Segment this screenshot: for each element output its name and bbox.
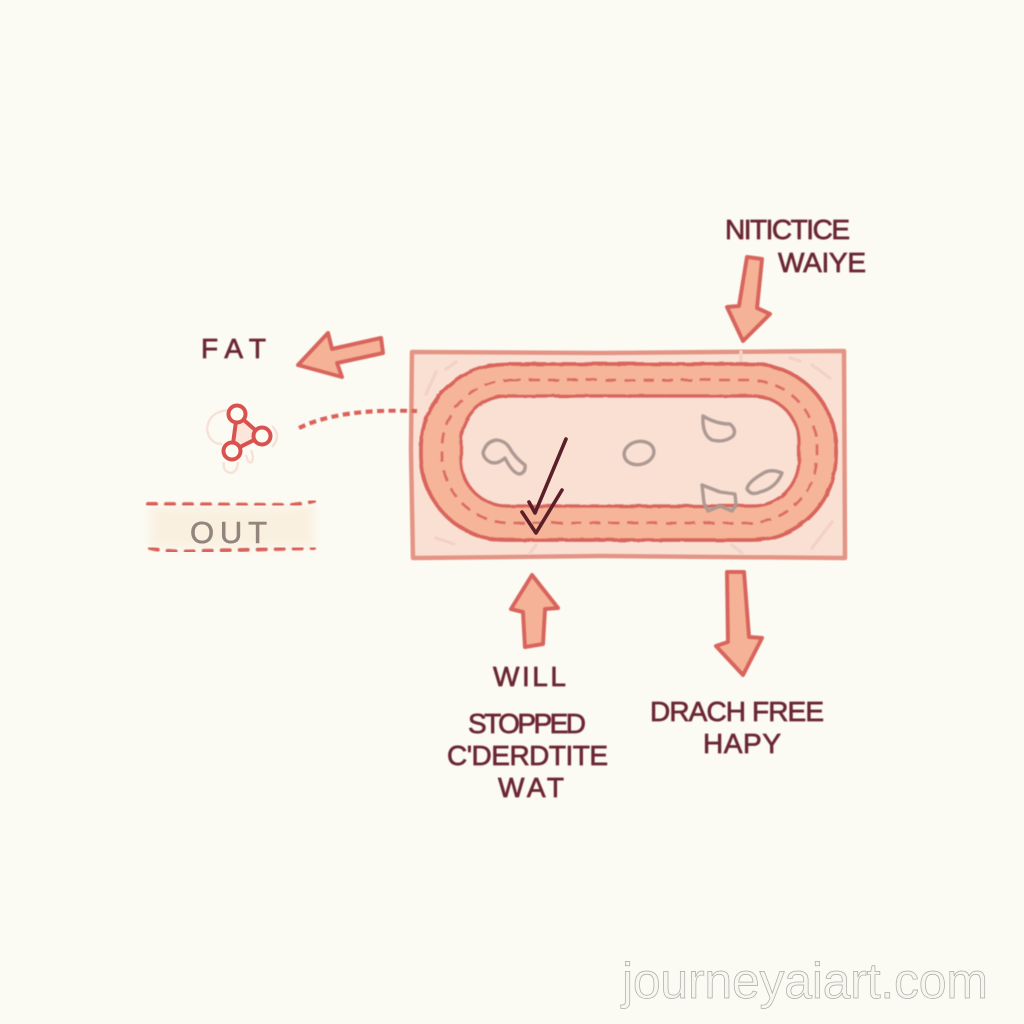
label: OUT: OUT [190, 515, 267, 550]
icon: fat molecule [207, 406, 277, 473]
label: STOPPED C'DERDTITE WAT [447, 708, 608, 803]
faded bubbles [207, 410, 277, 473]
label: NITICTICE WAIYE: NITICTICE [725, 214, 850, 245]
label: STOPPED C'DERDTITE WAT: C'DERDTITE [447, 740, 608, 771]
patch outer rectangle [411, 351, 845, 558]
vessel wall ring [421, 364, 836, 540]
faint corner marks [426, 352, 832, 553]
arrow: bottom out [716, 572, 762, 675]
label: DRACH FREE HAPY [650, 696, 824, 759]
OUT band [148, 501, 314, 552]
check mark [522, 439, 566, 533]
arrow: top in [727, 257, 770, 341]
vessel lumen [461, 396, 799, 506]
vessel midline dashes [442, 380, 817, 523]
label: WILL: WILL [493, 661, 566, 692]
label: NITICTICE WAIYE [725, 214, 866, 278]
label: DRACH FREE HAPY: DRACH FREE [650, 696, 824, 727]
arrow: bottom in [511, 575, 558, 647]
arrow: fat out [298, 333, 383, 377]
label: STOPPED C'DERDTITE WAT: WAT [498, 772, 564, 803]
label: DRACH FREE HAPY: HAPY [703, 728, 781, 759]
watermark: journeyaiart.com [620, 953, 988, 1009]
label: STOPPED C'DERDTITE WAT: STOPPED [468, 708, 586, 739]
label: NITICTICE WAIYE: WAIYE [778, 247, 866, 278]
dotted path to vessel [299, 411, 417, 428]
panel: tissue patch diagram [411, 351, 845, 558]
label: FAT: FAT [201, 333, 266, 364]
particle blobs [483, 416, 782, 511]
